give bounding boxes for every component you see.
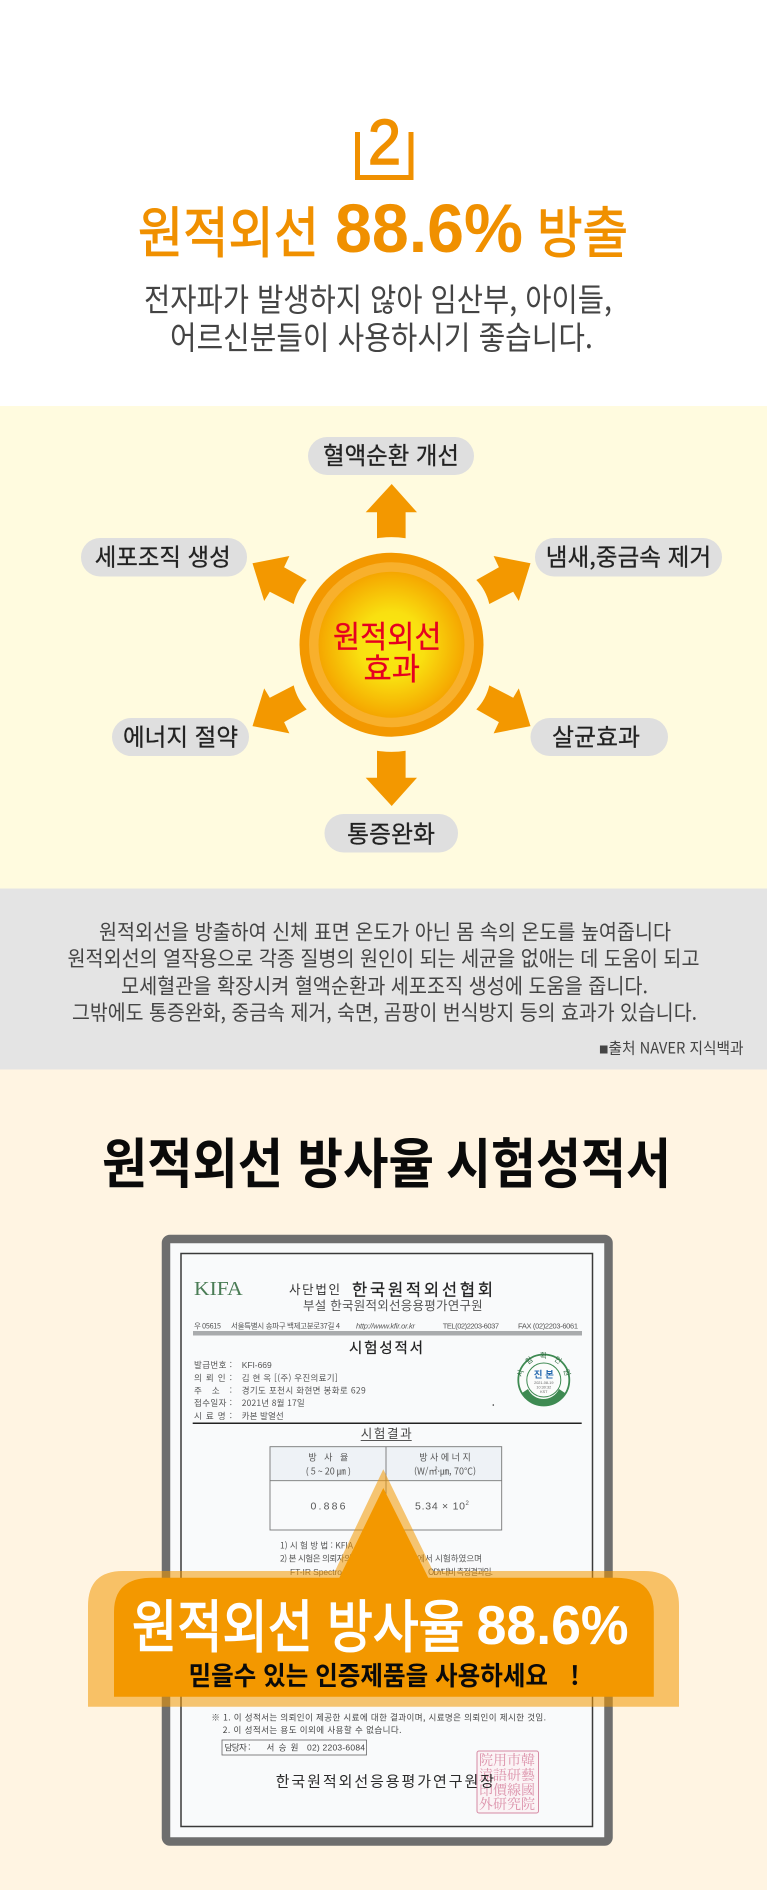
stamp: verified copy: 10:30:32	[536, 1386, 551, 1390]
center sun: 효과	[364, 644, 420, 689]
results table: 5.34 × 10	[415, 1500, 465, 1512]
section background: grey note	[0, 888, 767, 1070]
results table: 방 사 에 너 지	[419, 1450, 471, 1464]
seal: 院用市韓	[479, 1750, 535, 1770]
title: 88.6 percent emission: 88.6%	[335, 190, 523, 267]
intro text	[144, 275, 612, 359]
contact box	[222, 1740, 366, 1755]
stamp: verified copy: KST	[540, 1390, 548, 1394]
callout headline: 방사율	[327, 1582, 464, 1664]
stamp: verified copy: 진 본	[534, 1367, 554, 1381]
note text block: 원적외선의 열작용으로 각종 질병의 원인이 되는 세균을 없애는 데 도움이 되고	[68, 943, 700, 973]
document letterhead	[289, 1276, 493, 1314]
document frame	[166, 1239, 608, 1842]
applicant details: 접수일자 :	[194, 1397, 232, 1409]
section background: yellow effects	[0, 406, 767, 888]
seal: 外研究院	[479, 1794, 535, 1814]
results table: 2	[466, 1501, 470, 1507]
label: pain relief	[324, 814, 458, 852]
label: odor heavy metal removal: 냄새,중금속 제거	[546, 538, 711, 572]
applicant details: 김 현 옥 [(주) 우진의료기]	[242, 1372, 338, 1384]
label: pain relief: 통증완화	[347, 814, 435, 850]
results table: 방 사 율	[308, 1450, 348, 1464]
address row: 서울특별시 송파구 백제고분로37길 4	[231, 1320, 340, 1332]
results table: (W/㎡·㎛, 70℃)	[414, 1464, 476, 1478]
footnotes: ※ 1. 이 성적서는 의뢰인이 제공한 시료에 대한 결과이며, 시료명은 의뢰인이 제시한 것임.	[211, 1712, 546, 1724]
callout subline: 믿을수 있는 인증제품을 사용하세요	[188, 1656, 548, 1693]
black rule	[193, 1422, 582, 1424]
document letterhead: 한국원적외선협회	[352, 1276, 493, 1300]
callout headline: 원적외선	[132, 1582, 313, 1664]
arrow: lower left	[252, 685, 307, 733]
test notes: FT-IR Spectro	[290, 1567, 342, 1577]
center sun: 원적외선	[333, 612, 442, 657]
footnotes	[211, 1712, 546, 1736]
heading: certificate	[102, 1120, 671, 1199]
arrow: upper left	[252, 556, 307, 604]
label: sterilization	[530, 718, 668, 756]
document letterhead: 부설 한국원적외선응용평가연구원	[303, 1295, 483, 1314]
results table: ( 5 ~ 20 ㎛ )	[306, 1464, 351, 1478]
arrow: lower right	[476, 685, 530, 733]
document inner border	[181, 1254, 592, 1826]
contact box: 서 승 원	[266, 1742, 298, 1754]
document title: 시험성적서	[349, 1337, 423, 1358]
applicant details: 경기도 포천시 화현면 봉화로 629	[242, 1384, 366, 1396]
applicant details: KFI-669	[242, 1360, 272, 1370]
callout headline: 88.6%	[477, 1594, 629, 1656]
speck	[492, 1404, 494, 1406]
arrow: up	[366, 484, 417, 538]
heading: certificate: 시험성적서	[446, 1120, 671, 1199]
contact box: 담당자 :	[224, 1742, 250, 1754]
applicant details: 2021년 8월 17일	[242, 1397, 305, 1409]
test notes: 2) 본 시험은 의뢰자의	[280, 1553, 352, 1565]
callout outer glow	[88, 1469, 679, 1707]
address row	[194, 1320, 578, 1332]
footnotes: 2. 이 성적서는 용도 이외에 사용할 수 없습니다.	[223, 1724, 402, 1736]
icon: number 2 badge: 2	[368, 106, 401, 178]
title: 88.6 percent emission: 원적외선	[138, 188, 319, 268]
seal	[477, 1750, 538, 1814]
test notes: ODY대비 측정결과임.	[428, 1566, 493, 1578]
address row: TEL(02)2203-6037	[443, 1322, 499, 1330]
stamp: verified copy: 2021-08-19	[534, 1381, 554, 1385]
test notes	[280, 1539, 493, 1578]
contact box: 02) 2203-6084	[307, 1743, 365, 1753]
test notes: 에서 시험하였으며	[417, 1553, 482, 1565]
intro text: 어르신분들이 사용하시기 좋습니다.	[170, 313, 593, 359]
seal: 遠語研藝	[479, 1765, 535, 1785]
director signature line: 한국원적외선응용평가연구원장	[276, 1770, 494, 1792]
intro text: 전자파가 발생하지 않아 임산부, 아이들,	[144, 275, 612, 321]
heading: certificate: 원적외선	[102, 1120, 283, 1199]
title: 88.6 percent emission: 방출	[537, 188, 628, 268]
logo: KIFA: KIFA	[194, 1278, 243, 1300]
applicant details: 의 뢰 인 :	[194, 1372, 232, 1384]
icon: number 2 badge	[358, 106, 411, 178]
label: energy saving: 에너지 절약	[123, 718, 238, 752]
document letterhead: 사단법인	[289, 1279, 340, 1298]
diagram: far infrared effects	[81, 436, 722, 852]
applicant details: 주 소 :	[194, 1384, 232, 1396]
label: blood circulation: 혈액순환 개선	[323, 436, 459, 471]
heading: certificate: 방사율	[298, 1120, 434, 1199]
arrow: down	[366, 751, 417, 806]
title: 88.6 percent emission	[138, 188, 628, 268]
results table: 0.886	[310, 1500, 346, 1512]
grey rule	[193, 1331, 582, 1336]
note text block: 원적외선을 방출하여 신체 표면 온도가 아닌 몸 속의 온도를 높여줍니다	[99, 916, 671, 946]
applicant details	[194, 1359, 366, 1422]
note text block: 그밖에도 통증완화, 중금속 제거, 숙면, 곰팡이 번식방지 등의 효과가 있습니다.	[72, 997, 697, 1027]
callout headline	[132, 1582, 629, 1664]
applicant details: 발급번호 :	[194, 1359, 232, 1371]
callout: 88.6 percent emissivity	[88, 1469, 679, 1707]
applicant details: 카본 발열선	[242, 1410, 284, 1422]
applicant details: 시 료 명 :	[194, 1410, 232, 1422]
arrow: upper right	[476, 556, 530, 604]
section background: white intro	[0, 0, 767, 406]
section background: peach certificate	[0, 1070, 767, 1890]
test notes: 1) 시 험 방 법 : KFIA	[280, 1539, 354, 1551]
address row: http://www.kfir.or.kr	[356, 1322, 416, 1330]
results heading: 시험결과	[361, 1423, 412, 1442]
note text block: 모세혈관을 확장시켜 혈액순환과 세포조직 생성에 도움을 줍니다.	[121, 970, 648, 1000]
address row: FAX (02)2203-6061	[518, 1322, 578, 1330]
address row: 우 05615	[194, 1320, 221, 1332]
note text block	[68, 916, 700, 1027]
label: cell tissue: 세포조직 생성	[95, 538, 231, 572]
stamp: verified copy: 시 험 확 인 원	[517, 1352, 572, 1376]
certificate document	[162, 1234, 613, 1846]
callout subline: !	[570, 1656, 580, 1693]
stamp: verified copy	[517, 1352, 572, 1406]
callout body	[114, 1488, 654, 1697]
center sun	[300, 553, 484, 737]
source note: ■출처 NAVER 지식백과	[599, 1036, 744, 1058]
results table	[270, 1447, 502, 1530]
label: sterilization: 살균효과	[552, 718, 640, 752]
seal: 印價線國	[479, 1780, 535, 1800]
